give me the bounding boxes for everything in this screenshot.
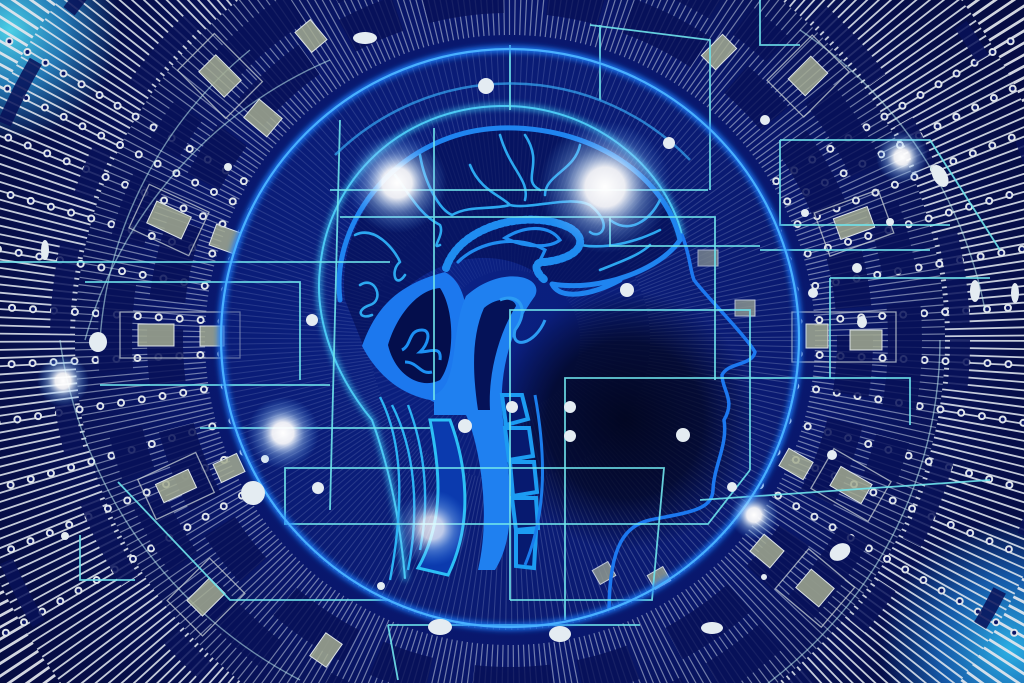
brain veins bbox=[355, 135, 660, 316]
brain stem and spinal column bbox=[380, 276, 545, 580]
light flares bbox=[37, 121, 928, 566]
chip surrounds bbox=[120, 34, 896, 636]
brain: corpus callosum arch bbox=[446, 220, 580, 280]
brain: cerebellum bbox=[362, 272, 467, 402]
head outline and skull band bbox=[319, 106, 755, 608]
circuit chips bbox=[138, 20, 882, 667]
brain interior bbox=[344, 130, 680, 350]
corner tint: top left bbox=[0, 0, 130, 140]
outer glowing ring bbox=[221, 49, 799, 627]
corner tint: bottom right bbox=[880, 520, 1024, 683]
main circle interior bbox=[220, 48, 800, 628]
dark void, lower right of head bbox=[495, 290, 755, 550]
